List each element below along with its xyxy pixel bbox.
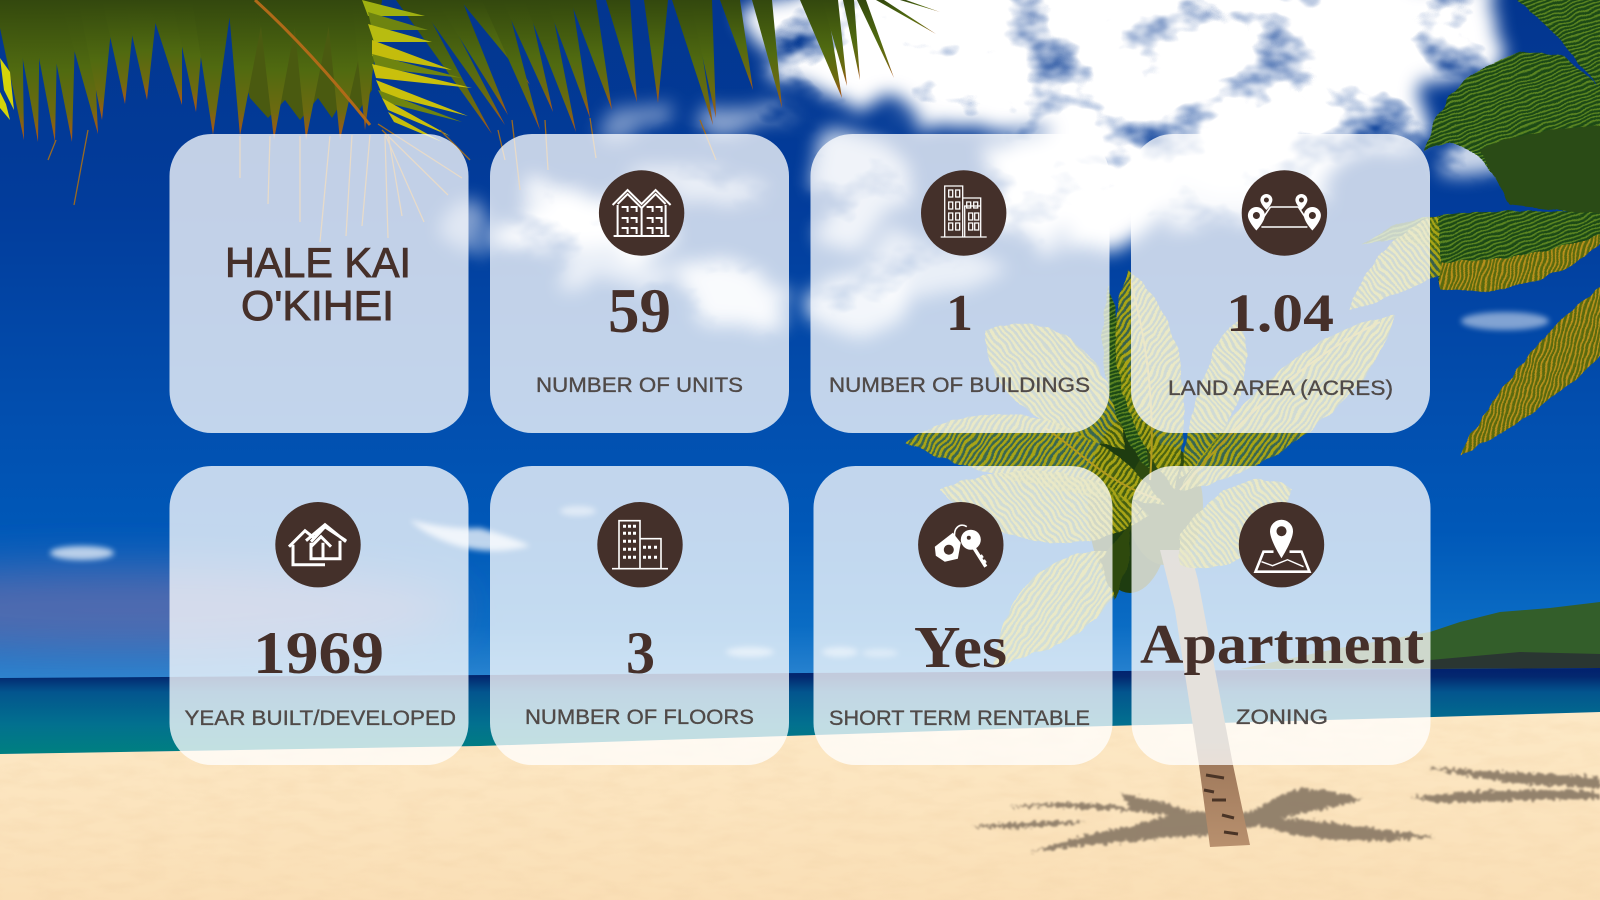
card: number of floors — [490, 466, 789, 765]
card: year built — [170, 466, 468, 765]
title text: HALE KAI — [225, 239, 411, 286]
background: horizon haze — [0, 568, 460, 652]
label: ZONING — [1236, 705, 1328, 729]
label: NUMBER OF FLOORS — [525, 705, 754, 729]
background: sand — [0, 712, 1600, 900]
label: NUMBER OF BUILDINGS — [829, 373, 1090, 397]
label: NUMBER OF UNITS — [536, 373, 743, 397]
title text: O'KIHEI — [241, 282, 394, 329]
background: clouds — [444, 0, 1530, 326]
value: 59 — [608, 275, 671, 346]
value: 1.04 — [1226, 283, 1334, 343]
icon: buildings — [921, 170, 1006, 256]
background: sky — [0, 0, 1600, 680]
title text — [225, 239, 411, 329]
card: number of buildings — [810, 134, 1110, 433]
card: land area — [1131, 134, 1430, 433]
value: 1969 — [253, 620, 384, 686]
background: small clouds — [50, 312, 1549, 657]
value: 1 — [946, 285, 973, 342]
label: SHORT TERM RENTABLE — [829, 706, 1090, 730]
card: number of units — [490, 134, 789, 433]
icon: houses — [275, 502, 361, 587]
background: ocean — [0, 668, 1600, 754]
background: distant headland — [1240, 602, 1600, 669]
background: central palm tree — [905, 270, 1395, 847]
value: Apartment — [1140, 614, 1424, 676]
icon: house keys — [918, 502, 1004, 587]
icon: map pin — [1239, 502, 1324, 587]
card: short term rentable — [814, 466, 1112, 765]
background: palm shadows on sand — [971, 767, 1600, 852]
card: title — [170, 134, 468, 433]
icon: apartment houses — [599, 170, 684, 256]
icon: tower block — [597, 502, 683, 587]
value: 3 — [626, 620, 655, 686]
icon: land plot pins — [1242, 170, 1327, 256]
background: right palm fronds — [1350, 0, 1600, 455]
value: Yes — [914, 614, 1007, 680]
card: zoning — [1132, 466, 1430, 765]
label: YEAR BUILT/DEVELOPED — [184, 706, 456, 730]
background: overhanging palm fronds, top — [0, 0, 940, 242]
label: LAND AREA (ACRES) — [1168, 376, 1393, 400]
